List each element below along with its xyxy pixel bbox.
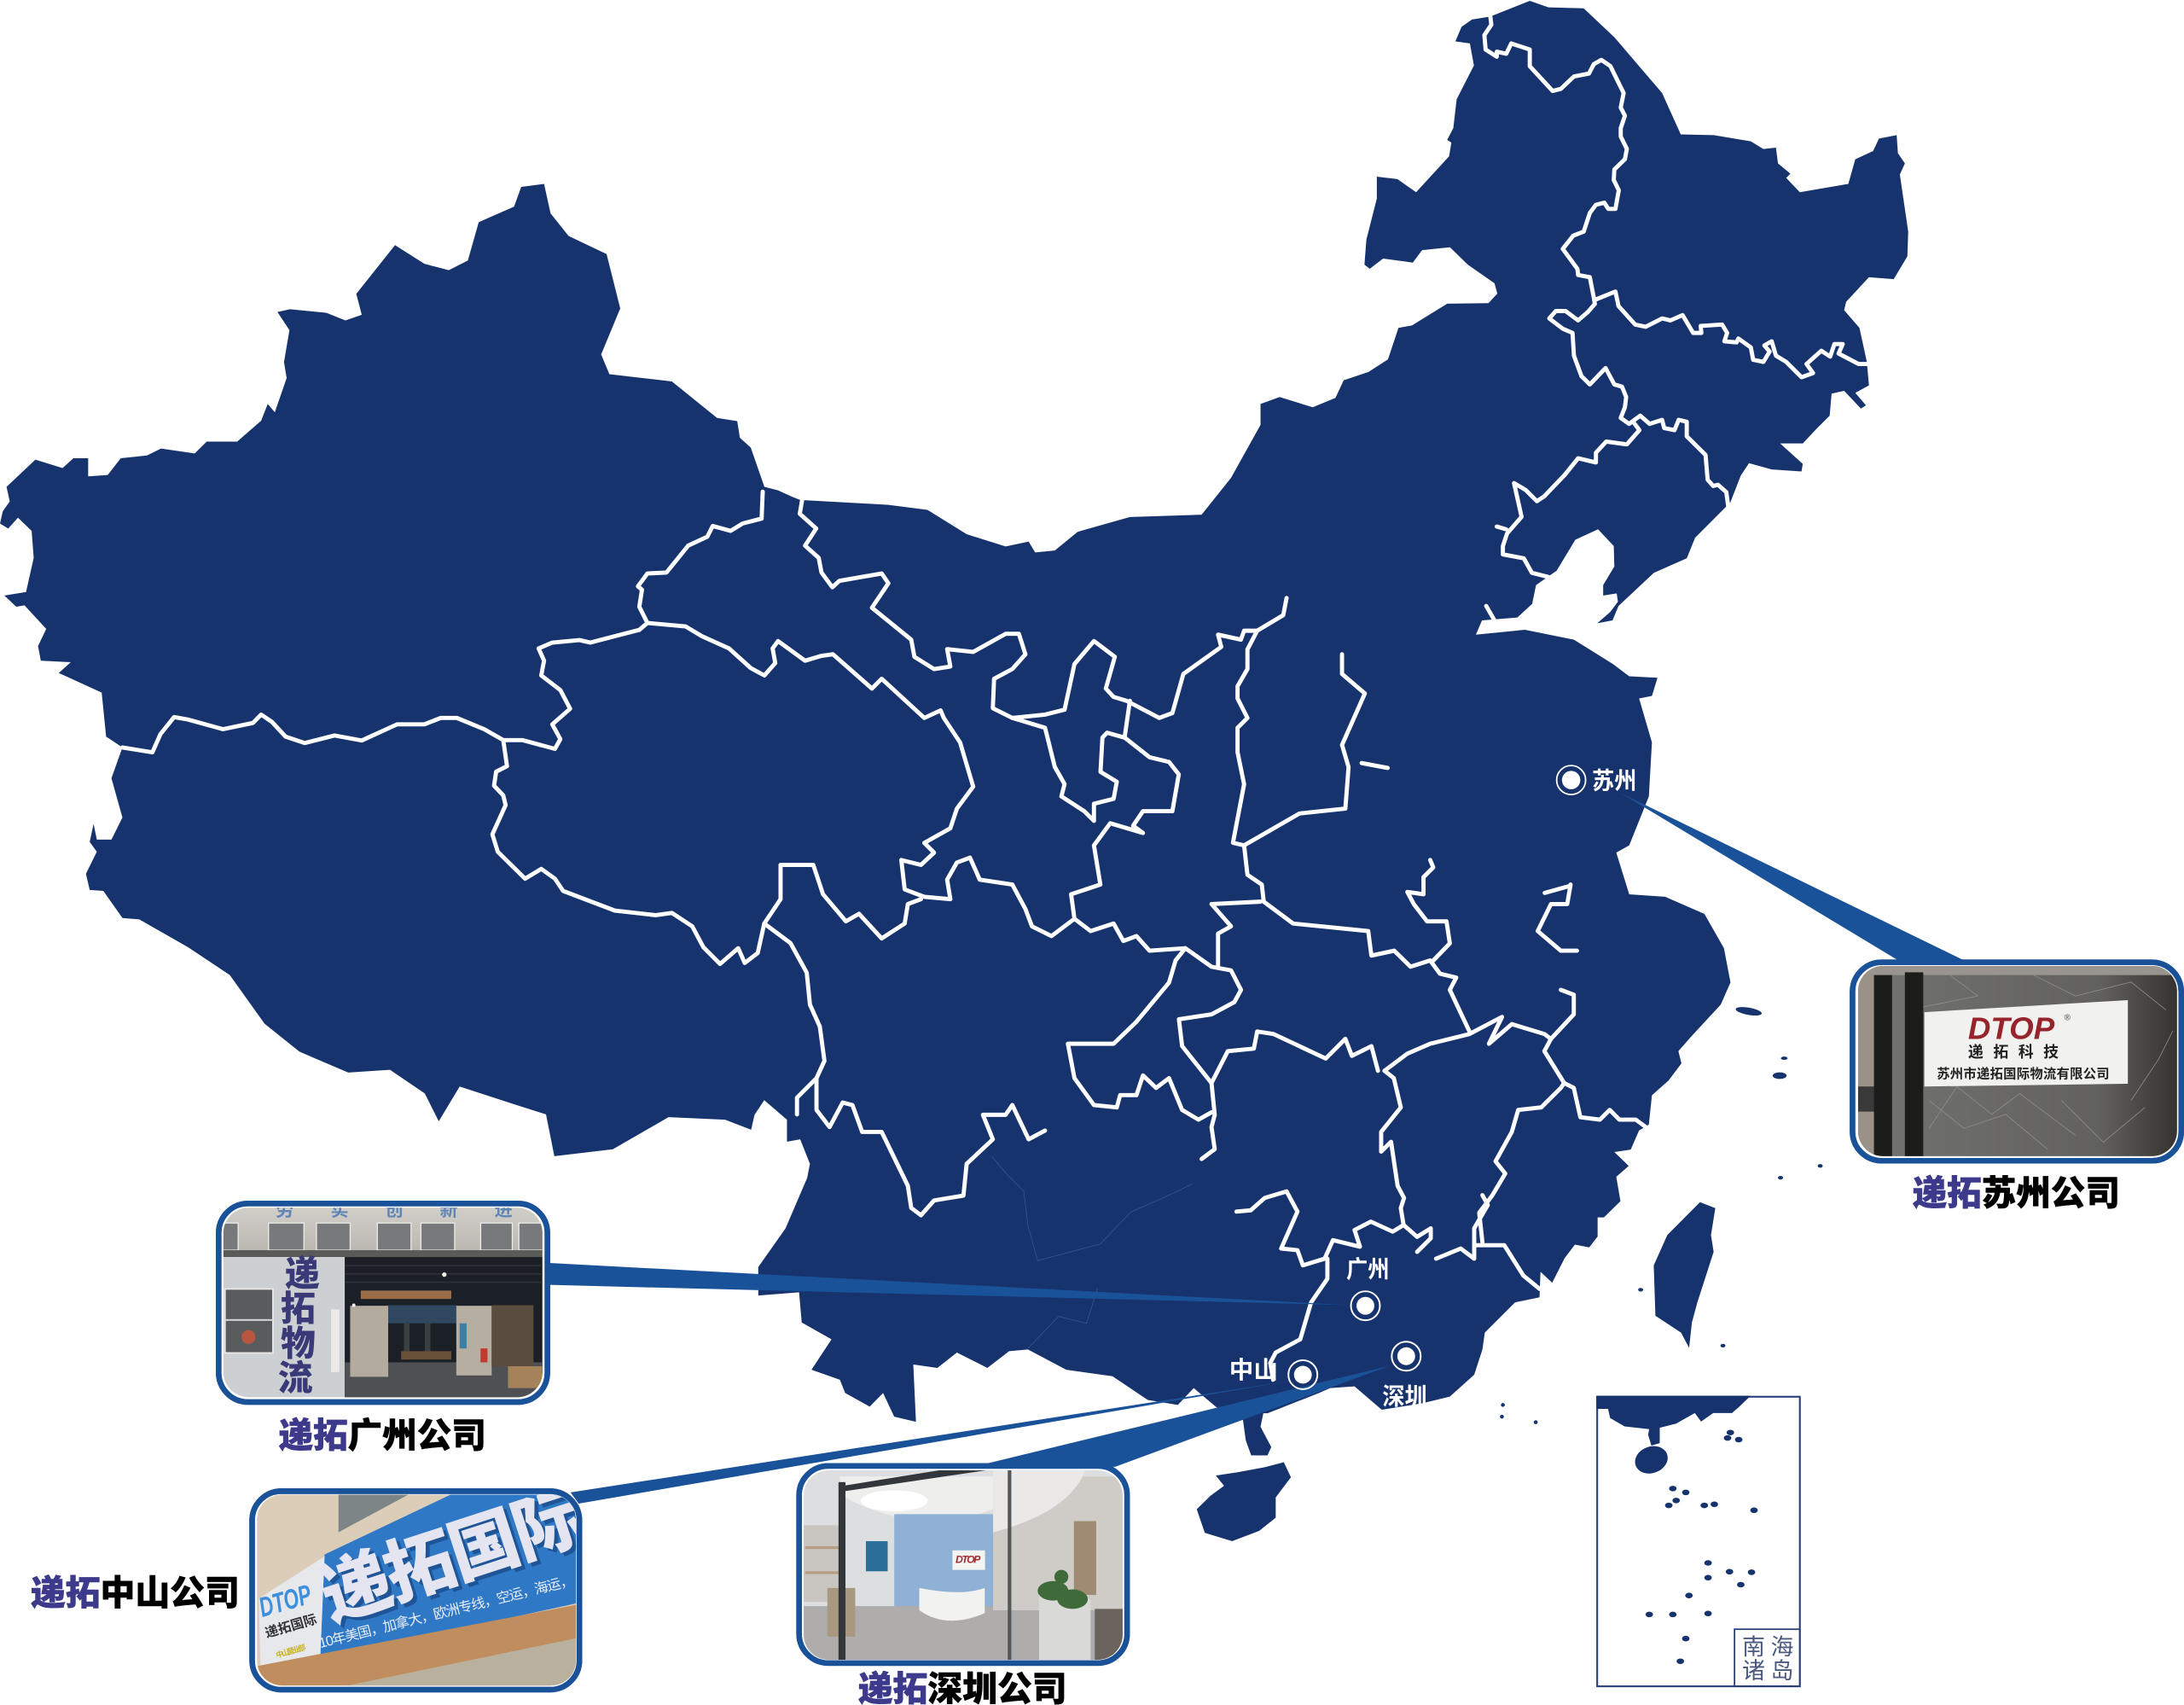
photo panel: Guangzhou: 劳 实 创 新 进 <box>276 1199 513 1220</box>
photo panel: Zhongshan: 递拓国际 <box>315 1481 597 1639</box>
city marker: Shenzhen: 深圳 <box>1382 1383 1427 1410</box>
photo panel: Suzhou: 苏州市递拓国际物流有限公司 <box>1937 1066 2110 1081</box>
inset land <box>1596 1396 1751 1446</box>
city marker: Guangzhou: 广州 <box>1346 1256 1390 1283</box>
inset label: 海 <box>1771 1634 1793 1660</box>
city marker: Zhongshan <box>1229 1357 1317 1389</box>
inset: South China Sea islands <box>1596 1396 1800 1686</box>
islands <box>1197 1005 1822 1541</box>
photo panel: Guangzhou: 流 <box>278 1359 313 1398</box>
photo panel: Suzhou: ® <box>2065 1014 2071 1023</box>
faint inner borders <box>991 1156 1193 1348</box>
caption: Guangzhou: 递拓广州公司 <box>279 1417 486 1455</box>
photo panel: Zhongshan: 递拓国际 <box>263 1610 319 1641</box>
photo panel: Zhongshan: 中山营业部 <box>275 1642 307 1660</box>
inset frame <box>1597 1397 1800 1686</box>
city marker: Zhongshan: 中山 <box>1229 1357 1278 1383</box>
photo panel: Suzhou: 递拓科技 <box>1968 1043 2059 1061</box>
map landmass <box>0 1 1908 1455</box>
wedge: Zhongshan <box>571 1382 1287 1504</box>
photo panel: Suzhou <box>1852 963 2181 1161</box>
photo panel: Shenzhen <box>799 1466 1127 1665</box>
callout wedges <box>549 793 1966 1504</box>
city marker: Suzhou: 苏州 <box>1592 768 1636 794</box>
photo panel: Guangzhou: 递 <box>285 1254 320 1294</box>
inset islands <box>1631 1429 1757 1664</box>
inset label: 诸 <box>1742 1658 1765 1684</box>
photo panel: Guangzhou: 拓 <box>281 1289 316 1328</box>
wedge: Guangzhou <box>549 1263 1349 1305</box>
photo panel: Guangzhou <box>218 1199 548 1402</box>
photo panel: Zhongshan: 10年美国，加拿大，欧洲专线，空运，海运， <box>317 1572 575 1651</box>
city marker: Suzhou <box>1557 765 1636 794</box>
photo panel: Zhongshan <box>253 1477 597 1690</box>
photo panel: Zhongshan: 递拓国际 <box>311 1478 594 1636</box>
map of China <box>0 1 1908 1541</box>
inset label <box>1734 1629 1800 1686</box>
caption: Zhongshan: 递拓中山公司 <box>31 1574 240 1612</box>
photo panel: Suzhou: DTOP <box>1968 1011 2054 1046</box>
caption: Suzhou: 递拓苏州公司 <box>1913 1174 2120 1213</box>
photo panel: Guangzhou: 物 <box>281 1324 316 1363</box>
wedge: Suzhou <box>1620 793 1966 961</box>
inset label: 岛 <box>1771 1658 1793 1684</box>
city marker: Shenzhen <box>1382 1341 1427 1410</box>
wedge: Shenzhen <box>985 1365 1390 1467</box>
photo panel: Shenzhen: DTOP <box>956 1554 981 1565</box>
photo panel: Zhongshan: DTOP <box>255 1578 315 1623</box>
province borders <box>123 16 1867 1380</box>
inset label: 南 <box>1742 1634 1765 1660</box>
city marker: Guangzhou <box>1346 1256 1390 1320</box>
